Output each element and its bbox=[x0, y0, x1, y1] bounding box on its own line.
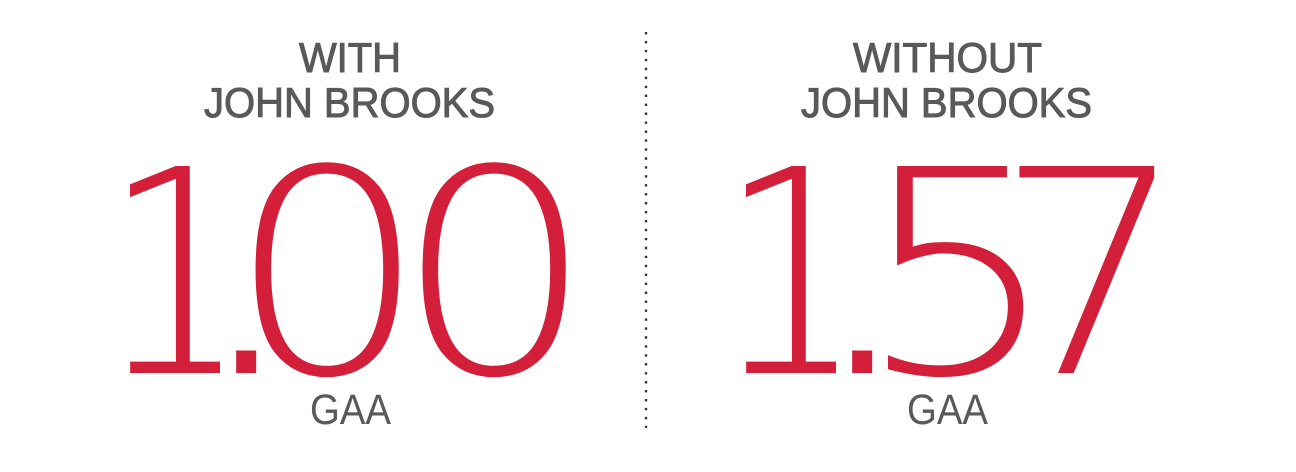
number: 1.57: 1 bbox=[704, 109, 885, 440]
heading: with John Brooks: JOHN BROOKS bbox=[204, 79, 495, 126]
infographic bbox=[130, 32, 1154, 428]
heading: with John Brooks bbox=[204, 34, 495, 126]
number: 1.00: 0 bbox=[227, 110, 428, 440]
heading: without John Brooks bbox=[801, 34, 1092, 126]
number: 1.57: . bbox=[833, 183, 891, 418]
number: 1.57: 7 bbox=[994, 110, 1188, 441]
number: 1.57: 5 bbox=[857, 111, 1059, 441]
number: 1.00: . bbox=[217, 183, 275, 418]
panel: without John Brooks bbox=[746, 42, 1154, 424]
heading: without John Brooks: WITHOUT bbox=[853, 34, 1042, 81]
heading: with John Brooks: WITH bbox=[299, 34, 401, 81]
dotted divider bbox=[645, 32, 647, 428]
panel: with John Brooks bbox=[130, 42, 566, 424]
label: GAA: GAA bbox=[310, 386, 391, 434]
number: 1.57 bbox=[746, 166, 1154, 377]
label: GAA: GAA bbox=[907, 386, 988, 434]
number: 1.00 bbox=[130, 162, 566, 378]
heading: without John Brooks: JOHN BROOKS bbox=[801, 79, 1092, 126]
number: 1.00: 1 bbox=[88, 109, 269, 440]
number: 1.00: 0 bbox=[394, 110, 595, 440]
